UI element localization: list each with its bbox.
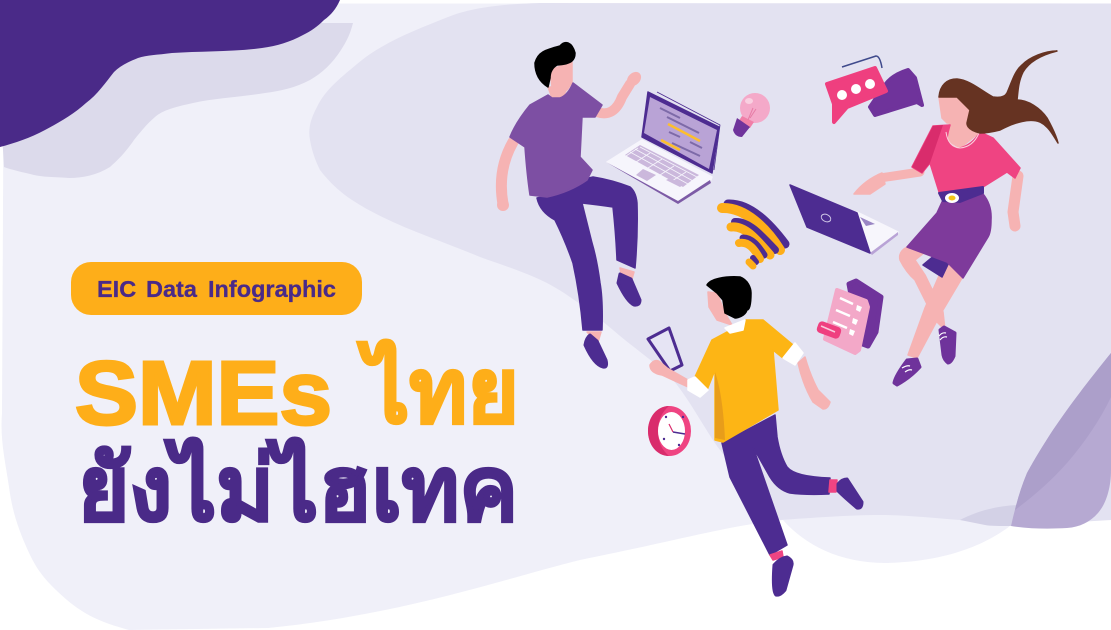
figure: woman in pink top: [854, 51, 1058, 385]
icon: light bulb: [733, 93, 770, 137]
shape: pale lilac wave at top left: [0, 23, 353, 178]
icon: chat bubbles: [827, 56, 922, 122]
figure: man in purple shirt: [497, 43, 644, 367]
icon: wifi signal: [722, 204, 785, 266]
title line 1: [75, 340, 519, 444]
shape: overlap tint at lower right: [960, 505, 1017, 526]
icon: document: [816, 281, 881, 353]
title line 2: ยังไม่ไฮเทค: [78, 438, 518, 540]
badge: EIC Data Infographic: Infographic: [208, 276, 336, 302]
icon: wall clock: [648, 406, 691, 456]
shape: darker purple corner band: [1015, 353, 1111, 510]
icon: closed laptop: [790, 185, 898, 255]
badge: EIC Data Infographic: EIC: [97, 276, 136, 302]
badge: EIC Data Infographic: Data: [146, 276, 198, 302]
icon: laptop open: [606, 92, 720, 204]
shape: purple corner blob: [1011, 353, 1111, 529]
icon: smartphone: [648, 328, 682, 371]
title line 1: ไทย: [357, 340, 519, 442]
panel: darker lavender background blob: [309, 3, 1111, 526]
title line 1: SMEs: [75, 344, 332, 444]
figure: man in yellow shirt: [648, 277, 862, 595]
shape: dark purple wave at top left: [0, 0, 340, 147]
badge: EIC Data Infographic: [71, 262, 362, 315]
